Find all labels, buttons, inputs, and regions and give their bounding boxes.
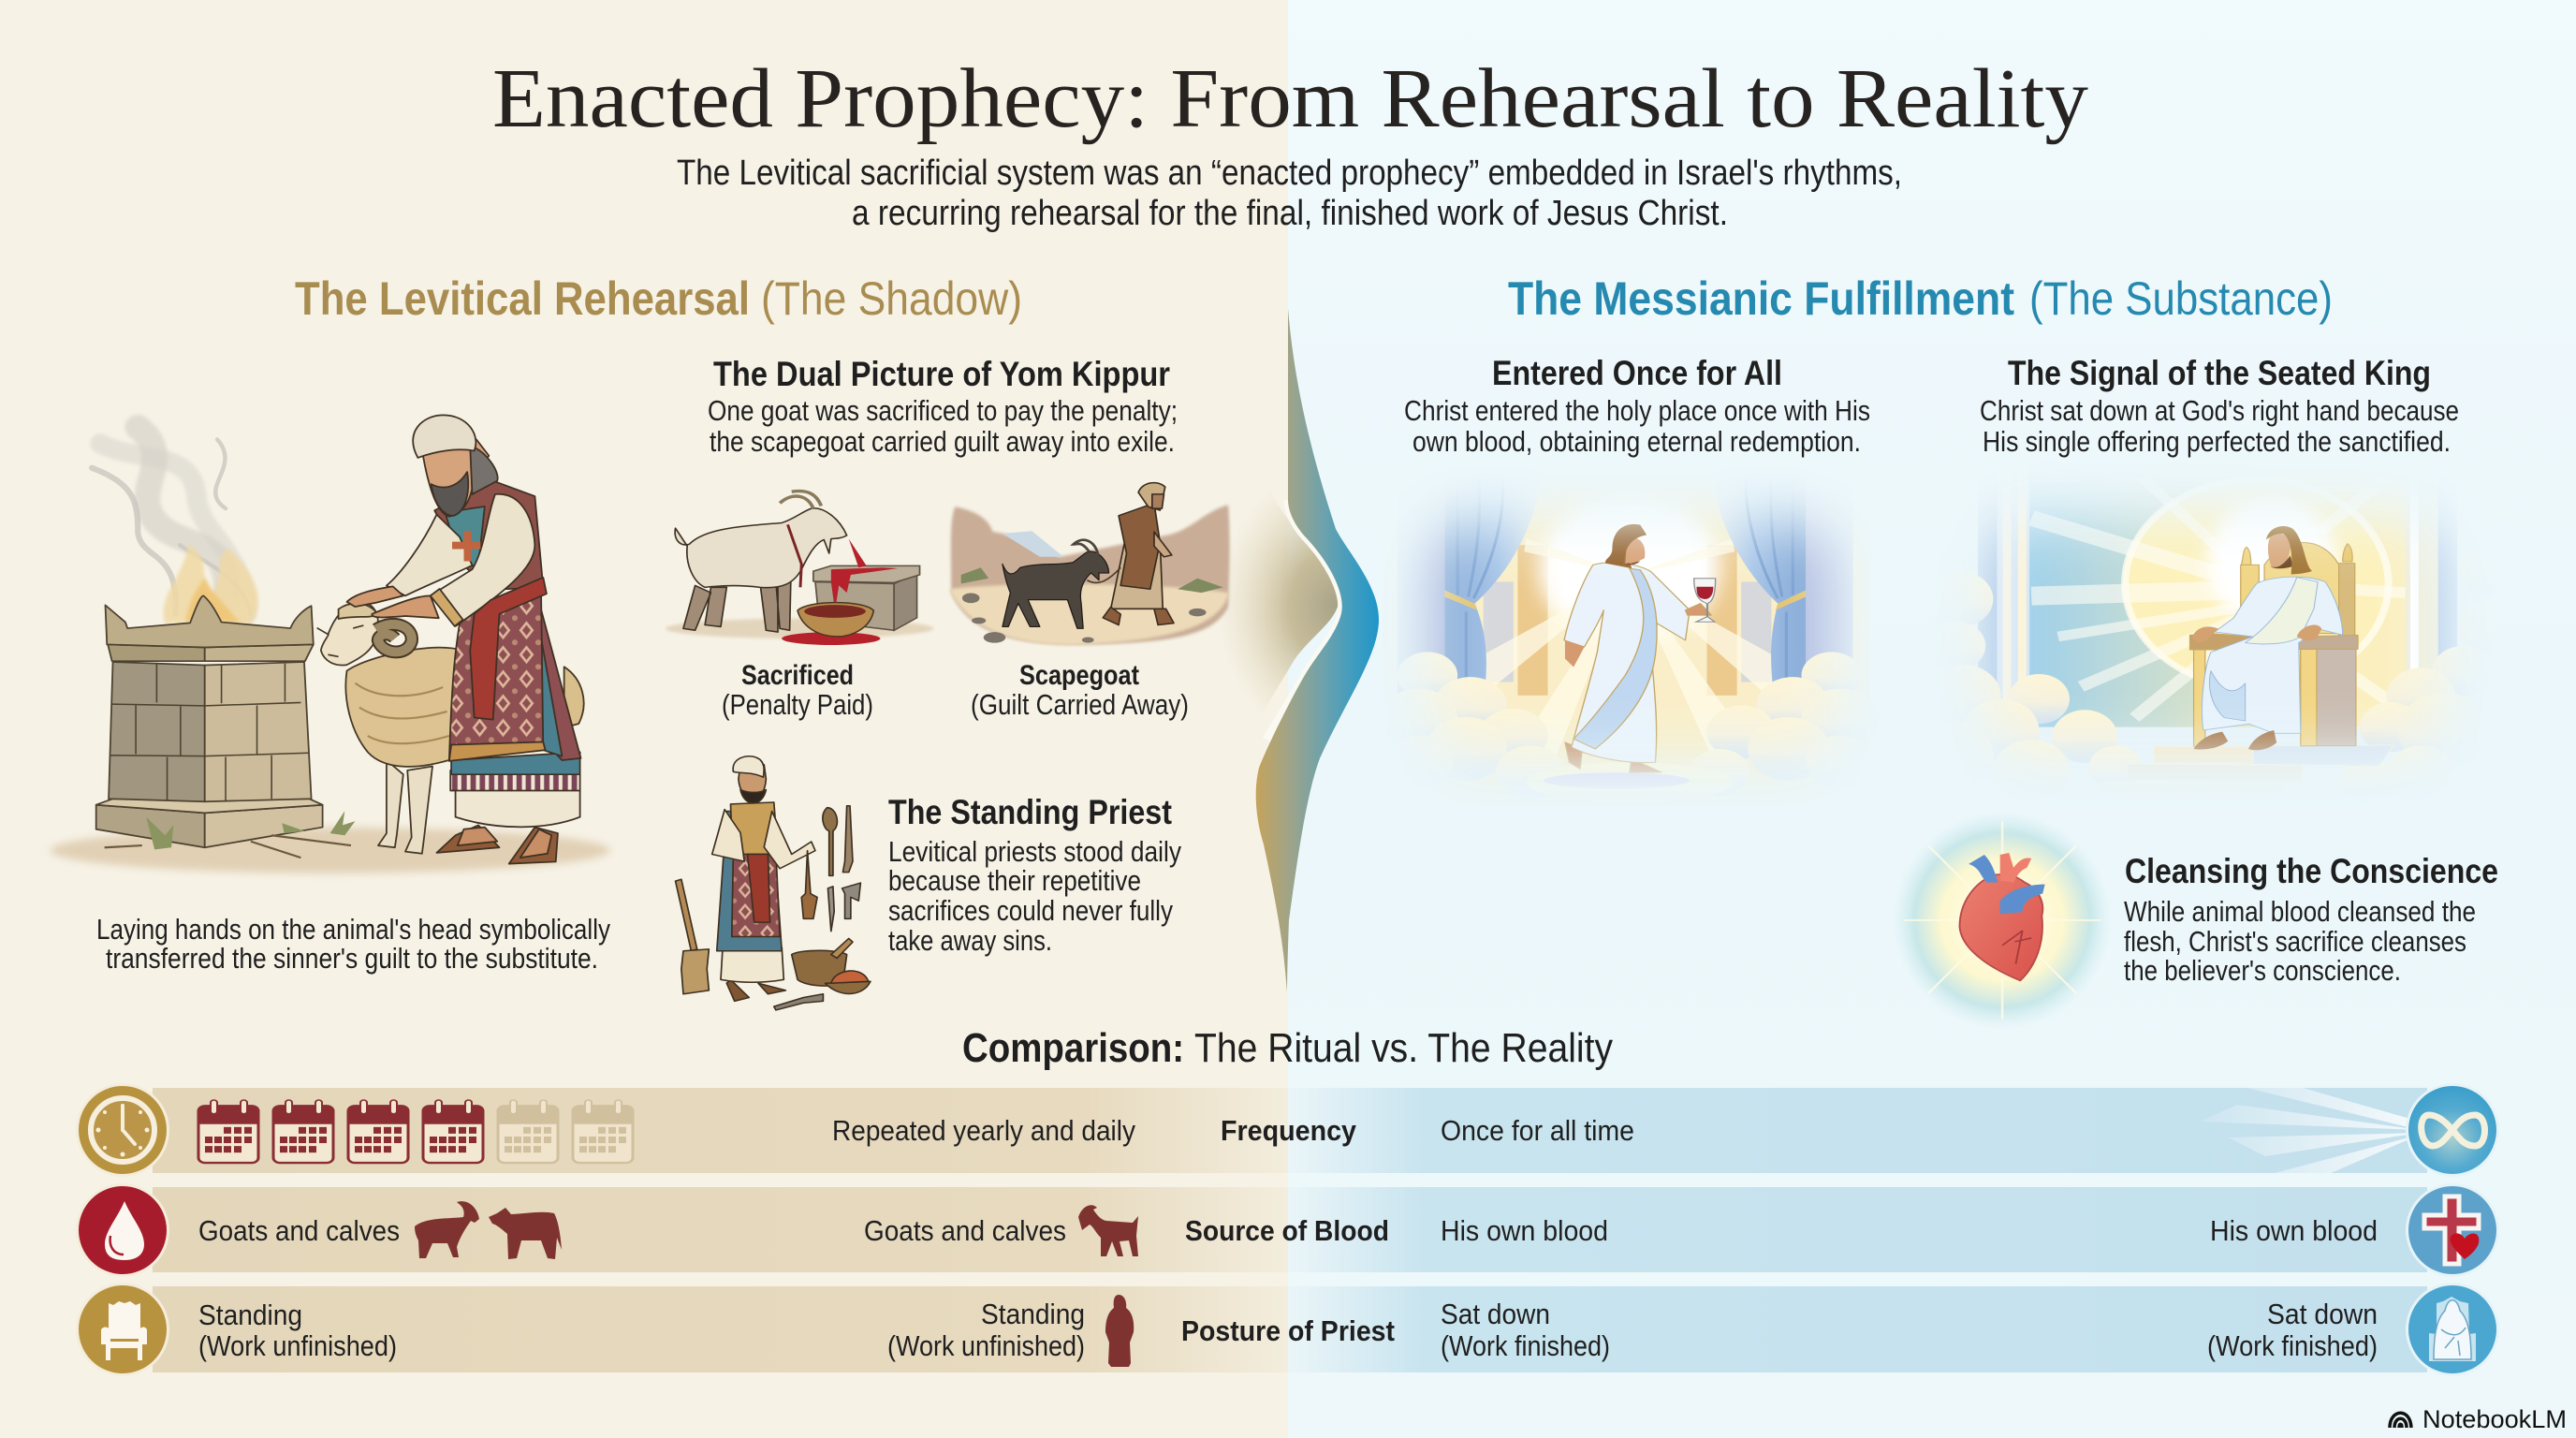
comparison row: Posture of Priest: Posture of Priest <box>1181 1314 1395 1347</box>
icon: standing figure <box>1105 1295 1134 1367</box>
heading: Levitical Rehearsal: The Levitical Rehearsal <box>295 272 750 325</box>
comparison row: Frequency: Frequency <box>1221 1114 1357 1147</box>
comparison row: Posture of Priest: (Work finished) <box>2207 1329 2378 1362</box>
block: Standing Priest: because their repetitive <box>888 864 1141 897</box>
bowl <box>798 603 873 637</box>
cup of wine <box>1694 579 1716 622</box>
altar <box>96 595 323 847</box>
columns <box>1978 496 2457 699</box>
block: Cleansing the Conscience: Cleansing the Conscience <box>2125 852 2498 890</box>
caption: laying hands: transferred the sinner's guilt to the substitute. <box>106 942 598 975</box>
illustration: standing priest with tools <box>676 756 871 1010</box>
comparison row: Posture of Priest: Standing <box>198 1299 302 1331</box>
illustration: scapegoat led into the wilderness <box>949 483 1230 645</box>
subtitle: a recurring rehearsal for the final, finished work of Jesus Christ. <box>852 194 1728 233</box>
illustration: Christ seated on the throne <box>1968 488 2460 777</box>
comparison row: Posture of Priest: (Work unfinished) <box>198 1329 397 1362</box>
illustration: Christ entering the holy place <box>1400 486 1863 786</box>
comparison row: Source of Blood: His own blood <box>2210 1214 2378 1247</box>
throne <box>2189 543 2358 746</box>
icon: clock <box>76 1083 169 1177</box>
heading: Messianic Fulfillment: The Messianic Fulfillment <box>1508 272 2014 325</box>
heading: Messianic Fulfillment <box>1508 272 2333 325</box>
block: Dual Picture of Yom Kippur: the scapegoat carried guilt away into exile. <box>710 425 1175 458</box>
comparison row: Frequency: Once for all time <box>1441 1114 1634 1147</box>
heading: Levitical Rehearsal: (The Shadow) <box>761 272 1022 325</box>
light rays <box>2200 1088 2420 1173</box>
comparison row: Frequency: Repeated yearly and daily <box>832 1114 1135 1147</box>
block: Entered Once for All <box>1404 354 1870 458</box>
bowls <box>792 950 847 986</box>
comparison row: Posture of Priest: Standing <box>981 1298 1085 1330</box>
divider: curved transition from shadow to substance <box>1230 309 1379 992</box>
block: Entered Once for All: Christ entered the holy place once with His <box>1404 394 1870 427</box>
tools <box>823 808 837 875</box>
icon: blood drop <box>76 1183 169 1277</box>
stone box <box>813 565 920 630</box>
illustration: priest laying hands on a ram beside the altar <box>51 415 610 873</box>
heading: comparison: Comparison: <box>962 1025 1184 1071</box>
block: Entered Once for All: Entered Once for All <box>1492 354 1782 392</box>
icon: NotebookLM logo <box>2390 1413 2411 1428</box>
steps <box>2142 745 2394 773</box>
block: Dual Picture of Yom Kippur: One goat was sacrificed to pay the penalty; <box>708 394 1178 427</box>
block: Dual Picture of Yom Kippur: The Dual Picture of Yom Kippur <box>713 355 1170 393</box>
subtitle: The Levitical sacrificial system was an “enacted prophecy” embedded in Israel's rhythms, <box>677 154 1902 193</box>
icon: small goat silhouette <box>1078 1205 1138 1256</box>
comparison row: Posture of Priest: (Work finished) <box>1441 1329 1610 1362</box>
heading: comparison: The Ritual vs. The Reality <box>1194 1025 1613 1071</box>
comparison row: Source of Blood: Goats and calves <box>198 1214 400 1247</box>
labels: Sacrificed and Scapegoat: Sacrificed <box>741 660 854 691</box>
icon: goat silhouette <box>415 1201 479 1258</box>
priest <box>347 415 580 864</box>
grass and twigs <box>146 811 355 849</box>
background: right sky half <box>1288 0 2576 1438</box>
comparison row: Posture of Priest <box>76 1283 2499 1376</box>
icon: infinity <box>2406 1083 2499 1177</box>
labels: Sacrificed and Scapegoat <box>722 660 1189 721</box>
smoke and flame <box>92 427 251 614</box>
labels: Sacrificed and Scapegoat: Scapegoat <box>1019 660 1139 691</box>
comparison row: Posture of Priest: (Work unfinished) <box>887 1329 1085 1362</box>
icon: calf silhouette <box>489 1208 562 1259</box>
clouds <box>1398 652 1853 779</box>
block: Cleansing the Conscience: the believer's conscience. <box>2124 954 2401 987</box>
block: Standing Priest: sacrifices could never fully <box>888 894 1173 927</box>
Christ figure <box>1564 563 1711 772</box>
block: Signal of the Seated King: His single offering perfected the sanctified. <box>1983 425 2451 458</box>
icons: calendars <box>198 1100 633 1163</box>
icon: seated Christ <box>2406 1283 2499 1376</box>
heading: Messianic Fulfillment: (The Substance) <box>2029 272 2333 325</box>
caption: laying hands: Laying hands on the animal's head symbolically <box>96 913 610 946</box>
illustration: sacrificed goat with bowl of blood <box>666 492 933 645</box>
leader <box>1103 483 1174 625</box>
subtitle <box>677 154 1902 233</box>
head <box>2268 534 2291 568</box>
block: Standing Priest <box>888 793 1181 957</box>
block: Signal of the Seated King <box>1980 354 2459 458</box>
icon: seat <box>76 1283 169 1376</box>
caption: laying hands <box>96 913 610 975</box>
comparison row: Source of Blood: His own blood <box>1441 1214 1608 1247</box>
block: Standing Priest: The Standing Priest <box>888 793 1172 831</box>
icon: radiant heart <box>1893 811 2113 1030</box>
block: Dual Picture of Yom Kippur <box>708 355 1178 458</box>
ram <box>317 603 584 854</box>
blood <box>831 539 898 610</box>
block: Cleansing the Conscience: While animal blood cleansed the <box>2124 895 2476 928</box>
clouds <box>1971 574 2457 770</box>
comparison row: Frequency <box>76 1083 2499 1177</box>
mortar <box>676 879 697 951</box>
watermark: NotebookLM: NotebookLM <box>2422 1405 2567 1433</box>
block: Cleansing the Conscience <box>2124 852 2498 987</box>
heading: comparison <box>962 1025 1613 1071</box>
labels: Sacrificed and Scapegoat: (Penalty Paid) <box>722 688 873 721</box>
curtains <box>1444 490 1535 680</box>
comparison row: Source of Blood: Source of Blood <box>1185 1214 1389 1247</box>
comparison row: Source of Blood <box>76 1183 2499 1277</box>
title: Enacted Prophecy: From Rehearsal to Reality <box>492 52 2088 145</box>
block: Cleansing the Conscience: flesh, Christ's sacrifice cleanses <box>2124 925 2466 958</box>
black goat <box>1003 551 1109 628</box>
labels: Sacrificed and Scapegoat: (Guilt Carried Away) <box>971 688 1189 721</box>
comparison row: Posture of Priest: Sat down <box>1441 1298 1550 1330</box>
ground <box>51 828 610 873</box>
goat <box>675 508 847 632</box>
background: left parchment half <box>0 0 1288 1438</box>
block: Signal of the Seated King: The Signal of the Seated King <box>2008 354 2431 392</box>
block: Entered Once for All: own blood, obtaining eternal redemption. <box>1412 425 1861 458</box>
comparison row: Posture of Priest: Sat down <box>2267 1298 2378 1330</box>
block: Standing Priest: take away sins. <box>888 924 1052 957</box>
robed figure <box>2202 577 2343 733</box>
comparison row: Source of Blood: Goats and calves <box>864 1214 1066 1247</box>
block: Standing Priest: Levitical priests stood daily <box>888 835 1181 868</box>
icon: cross with heart <box>2406 1183 2499 1277</box>
block: Signal of the Seated King: Christ sat down at God's right hand because <box>1980 394 2459 427</box>
